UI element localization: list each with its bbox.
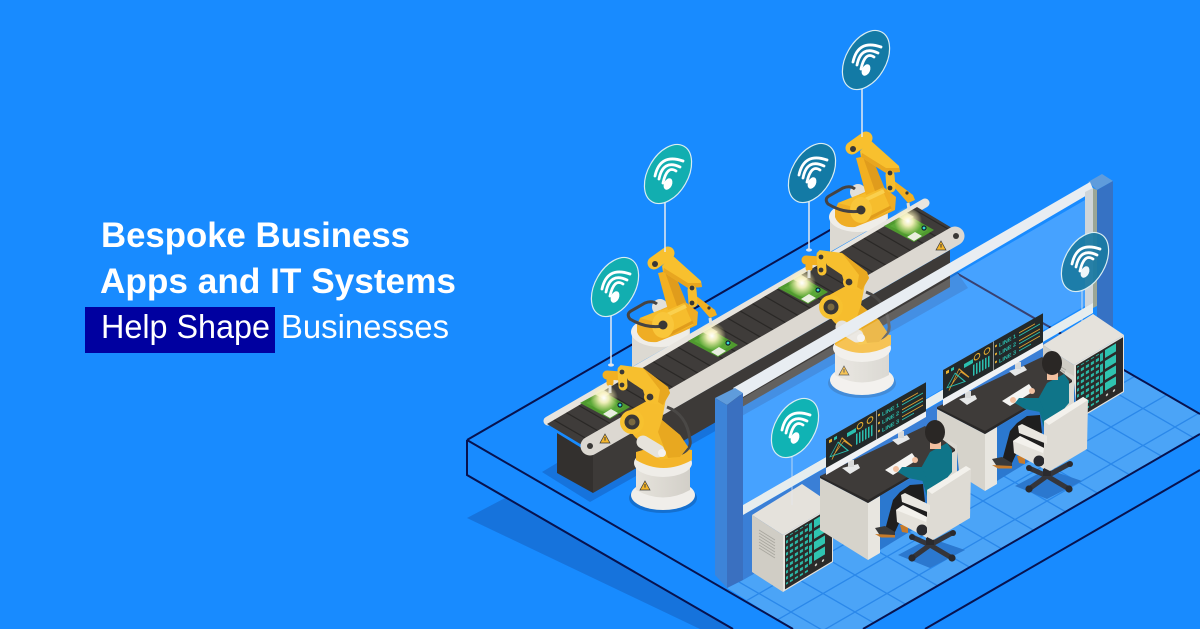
glass bottom rail [743,303,1093,515]
wifi balloon: left high [635,136,701,252]
floor: tiled control room floor [727,367,1200,629]
wifi balloon: middle [779,135,845,252]
warning sign left [600,434,610,443]
robot arm: front left [607,365,697,513]
wifi balloon: front server [762,390,828,505]
left pillar [715,388,743,588]
circuit board 4 [884,207,934,242]
robot pedestal: back left [631,317,690,367]
workstation: front operator [820,382,971,568]
robot arm: back right [826,138,915,227]
conveyor base [557,250,950,493]
workstation: rear operator [937,313,1088,499]
conveyor end roller left [587,443,593,449]
robot arm: front middle [806,250,896,398]
conveyor end roller right [953,233,959,239]
headline line 3 highlighted: Help Shape [101,308,270,345]
headline line 2: Apps and IT Systems [100,262,456,301]
platform outline [467,215,1200,629]
server: front [752,484,833,592]
wifi balloon: left low [582,249,648,367]
conveyor belt [547,203,959,493]
conveyor shadow [542,262,968,502]
circuit board 1 [580,384,630,419]
circuit board 3 [778,269,828,304]
server: rear [1043,314,1124,422]
headline line 1: Bespoke Business [101,216,410,255]
glass top rail [733,182,1094,397]
conveyor front rail [590,236,955,446]
conveyor belt surface [547,207,952,445]
robot pedestal: back right [829,202,888,252]
wifi balloon: right wall [1052,224,1118,335]
platform shadow [467,497,733,629]
right pillar [1088,174,1113,340]
warning sign right [936,241,946,250]
wifi balloon: top [833,22,899,137]
highlight box [85,307,275,353]
headline [85,216,456,353]
glass wall [733,182,1097,515]
conveyor back rail [548,203,925,421]
rear wall base [743,314,1095,580]
robot arm: back left [628,253,717,342]
headline line 3: Businesses [281,308,449,345]
glass pane [743,200,1085,505]
glass right post [1085,188,1093,312]
circuit board 2 [688,322,738,357]
